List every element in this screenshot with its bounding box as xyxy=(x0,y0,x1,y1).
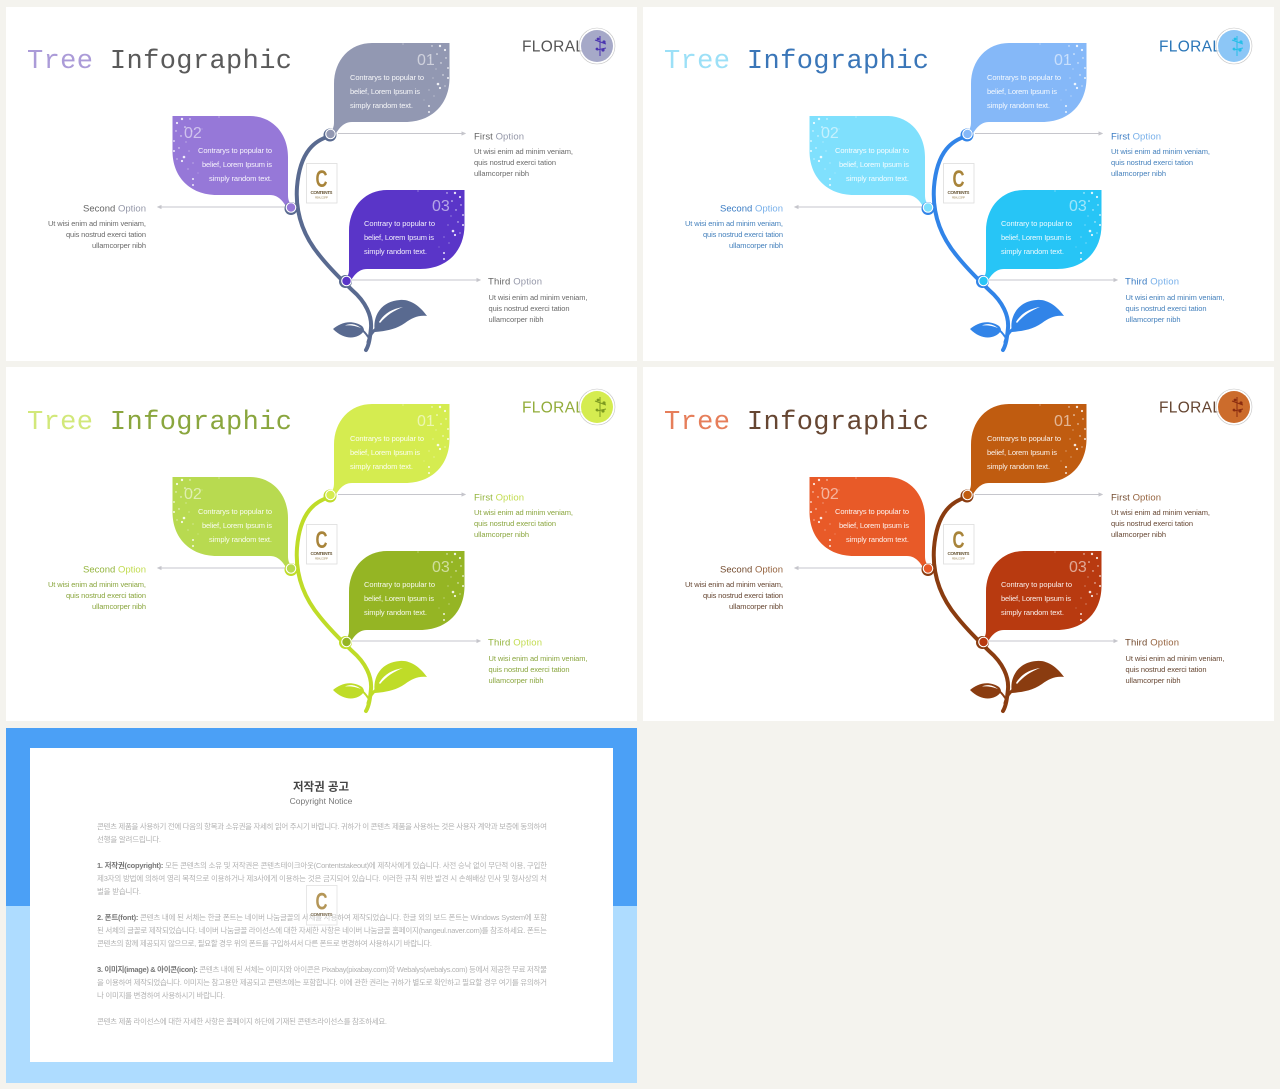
section 2: font: 2. 폰트(font): 콘텐츠 내에 된 서체는 한글 폰트는 네이버 나눔글꼴의 서체를 사용하여 제작되었습니다. 한글 외의 보드 폰트는 Windows System에 포함 xyxy=(97,912,547,922)
leaf 03: Contrary to popular to xyxy=(364,580,435,589)
leaf 01: Contrarys to popular to xyxy=(987,434,1061,443)
node 02 xyxy=(284,563,298,576)
section 1: copyright: 벌을 받습니다. xyxy=(97,886,141,896)
light blue background bottom xyxy=(6,906,637,1083)
section 3: image and icon: 3. 이미지(image) & 아이콘(icon): 콘텐츠 내에 된 서체는 이미지와 아이콘은 Pixabay(pixabay.com)와 Webalys(webalys.com) 등에서 제공한 무료 저작물 xyxy=(97,964,547,974)
leaf 01: 01 xyxy=(417,52,435,69)
leaf 01: belief, Lorem Ipsum is xyxy=(350,448,420,457)
node 01 xyxy=(324,128,336,142)
leaf 02: Contrarys to popular to xyxy=(835,507,909,516)
text: first option: First Option xyxy=(1111,492,1161,504)
text: first option: ullamcorper nibh xyxy=(1111,530,1166,539)
connector line: first option xyxy=(338,493,465,496)
logo: Contents stamp: REAL CORP xyxy=(952,196,965,200)
text: third option: ullamcorper nibh xyxy=(488,315,544,324)
leaf 03 xyxy=(343,190,464,286)
logo: Floral xyxy=(1159,389,1252,425)
text: first option: First Option xyxy=(474,132,524,142)
leaf 03: Contrary to popular to xyxy=(1001,219,1072,228)
leaf 02: Contrarys to popular to xyxy=(198,146,272,155)
tree stem xyxy=(934,136,1008,350)
text: first option: quis nostrud exerci tation xyxy=(1111,519,1193,528)
connector line: second option xyxy=(158,567,285,569)
node 01 xyxy=(960,490,974,502)
leaf 03: simply random text. xyxy=(1001,608,1064,617)
logo: Contents stamp: CONTENTS xyxy=(948,551,970,556)
watermark: Contents stamp xyxy=(306,886,337,925)
text: third option: quis nostrud exerci tation xyxy=(1126,304,1206,313)
tree stem xyxy=(297,136,371,350)
text: third option: Third Option xyxy=(1125,638,1179,648)
logo: Contents stamp xyxy=(306,164,337,203)
text: second option: Ut wisi enim ad minim veniam, xyxy=(685,580,783,589)
logo: Contents stamp: CONTENTS xyxy=(310,190,332,195)
leaf 03 xyxy=(980,551,1102,647)
intro paragraph: 콘텐츠 제품을 사용하기 전에 다음의 항목과 소유권을 자세히 읽어 주시기 바랍니다. 귀하가 이 콘텐츠 제품을 사용하는 것은 사용자 계약과 보증에 동의하여 xyxy=(97,821,547,831)
text: second option xyxy=(685,564,783,611)
leaf 03: 03 xyxy=(1069,559,1087,576)
logo: Contents stamp: REAL CORP xyxy=(315,196,328,200)
logo: Floral: FLORAL xyxy=(522,400,584,416)
text: second option xyxy=(685,204,783,250)
text: first option: Ut wisi enim ad minim veniam, xyxy=(1111,147,1210,156)
logo: Contents stamp xyxy=(944,524,974,564)
white notice card xyxy=(30,748,613,1062)
node 01 xyxy=(960,128,974,142)
title: Tree Infographic xyxy=(27,408,292,438)
leaf 01: simply random text. xyxy=(350,462,413,471)
section 3: image and icon: 나 이미지를 변경하여 사용하시기 바랍니다. xyxy=(97,990,225,1000)
heading: copyright notice Korean: 저작권 공고 xyxy=(293,780,349,794)
logo: Floral xyxy=(1159,28,1252,64)
connector line: third option xyxy=(352,279,480,281)
text: second option: Second Option xyxy=(83,204,146,214)
section 1: copyright: 1. 저작권(copyright): 모든 콘텐츠의 소유 및 저작권은 콘텐츠테이크아웃(Contentstakeout)에 제작사에게 있습니다. 사전 승낙 없이 무단적 이용, 구입한 xyxy=(97,860,547,870)
text: second option xyxy=(48,564,146,611)
section 3: image and icon xyxy=(97,964,547,1000)
text: first option: ullamcorper nibh xyxy=(474,169,529,178)
section 1: copyright: 제3자의 방법에 의하여 영리 목적으로 이용하거나 제3사에게 이용하는 것은 금지되어 있습니다. 이러한 규칙 위반 발견 시 손해배상 민사 및 형사상의 처 xyxy=(97,873,547,883)
text: first option: Ut wisi enim ad minim veniam, xyxy=(474,147,573,156)
text: third option: quis nostrud exerci tation xyxy=(488,665,570,674)
connector line: first option xyxy=(975,132,1102,135)
text: first option: Ut wisi enim ad minim veniam, xyxy=(474,508,573,517)
panel background xyxy=(643,7,1274,361)
logo: Contents stamp: REAL CORP xyxy=(315,556,328,560)
text: third option: ullamcorper nibh xyxy=(1126,315,1180,324)
leaf 03: Contrary to popular to xyxy=(364,219,435,228)
tree stem xyxy=(934,497,1008,711)
blue background top xyxy=(6,728,637,906)
node 02 xyxy=(284,202,298,215)
leaf 01: simply random text. xyxy=(350,101,413,110)
text: second option: quis nostrud exerci tation xyxy=(703,230,783,239)
intro paragraph xyxy=(97,821,547,844)
text: second option: Second Option xyxy=(720,564,783,576)
tree base leaves xyxy=(970,661,1064,703)
leaf 01 xyxy=(328,404,450,500)
leaf 03: simply random text. xyxy=(364,247,427,256)
watermark: Contents stamp: CONTENTS xyxy=(310,912,332,917)
text: third option: quis nostrud exerci tation xyxy=(1126,665,1206,674)
leaf 02 xyxy=(810,116,931,212)
logo: Floral xyxy=(522,389,615,425)
leaf 02: 02 xyxy=(184,125,202,142)
leaf 02: simply random text. xyxy=(846,535,909,544)
leaf 01: Contrarys to popular to xyxy=(350,434,424,443)
panel: orange tree infographic xyxy=(643,367,1274,721)
text: second option: Ut wisi enim ad minim veniam, xyxy=(685,219,783,228)
tree base leaves xyxy=(970,300,1064,342)
closing line: 콘텐츠 제품 라이선스에 대한 자세한 사항은 홈페이지 하단에 기재된 콘텐츠라이선스를 참조하세요. xyxy=(97,1016,387,1026)
panel background xyxy=(643,367,1274,721)
panel: purple tree infographic xyxy=(6,7,637,361)
text: third option: Third Option xyxy=(488,638,542,648)
leaf 01: 01 xyxy=(417,413,435,430)
panel: green tree infographic xyxy=(6,367,637,721)
node 03 xyxy=(339,275,352,288)
text: third option: Ut wisi enim ad minim veniam, xyxy=(488,654,588,663)
text: second option: Second Option xyxy=(83,564,146,576)
leaf 02: simply random text. xyxy=(209,535,272,544)
text: first option: First Option xyxy=(1111,132,1161,142)
text: first option: quis nostrud exerci tation xyxy=(474,158,556,167)
logo: Contents stamp: CONTENTS xyxy=(310,551,332,556)
node 01 xyxy=(324,490,336,502)
leaf 01: belief, Lorem Ipsum is xyxy=(987,87,1057,96)
leaf 02: belief, Lorem Ipsum is xyxy=(202,521,272,530)
leaf 01: 01 xyxy=(1054,413,1072,430)
logo: Floral xyxy=(522,28,615,64)
text: third option: Ut wisi enim ad minim veniam, xyxy=(1126,293,1224,302)
text: first option: ullamcorper nibh xyxy=(1111,169,1166,178)
leaf 02 xyxy=(172,477,294,573)
connector line: third option xyxy=(989,640,1117,642)
logo: Floral: FLORAL xyxy=(522,38,584,56)
text: third option: ullamcorper nibh xyxy=(488,676,544,685)
text: second option: Ut wisi enim ad minim veniam, xyxy=(48,219,146,228)
text: second option: Second Option xyxy=(720,204,783,214)
text: first option xyxy=(1111,492,1210,539)
leaf 02: simply random text. xyxy=(209,174,272,183)
text: third option: Ut wisi enim ad minim veniam, xyxy=(488,293,588,302)
leaf 03: 03 xyxy=(1069,198,1087,215)
logo: Contents stamp: C xyxy=(316,166,328,193)
text: first option xyxy=(1111,132,1210,178)
text: third option: quis nostrud exerci tation xyxy=(488,304,570,313)
leaf 01 xyxy=(328,43,450,139)
panel background xyxy=(6,7,637,361)
leaf 03: simply random text. xyxy=(364,608,427,617)
section 2: font xyxy=(97,912,547,948)
section 1: copyright xyxy=(97,860,547,896)
leaf 01 xyxy=(965,404,1086,500)
text: second option: ullamcorper nibh xyxy=(92,602,146,611)
leaf 02: 02 xyxy=(821,486,839,503)
panel: copyright notice xyxy=(6,728,637,1083)
leaf 01: Contrarys to popular to xyxy=(350,73,424,82)
intro paragraph: 선행을 알려드립니다. xyxy=(97,834,161,844)
leaf 02 xyxy=(172,116,294,212)
text: second option xyxy=(48,204,146,250)
text: second option: ullamcorper nibh xyxy=(729,602,783,611)
leaf 03: Contrary to popular to xyxy=(1001,580,1072,589)
title: Tree Infographic xyxy=(27,47,292,77)
leaf 02: belief, Lorem Ipsum is xyxy=(839,160,909,169)
node 03 xyxy=(976,275,989,288)
leaf 01: belief, Lorem Ipsum is xyxy=(350,87,420,96)
leaf 03: belief, Lorem Ipsum is xyxy=(364,233,434,242)
leaf 03 xyxy=(343,551,464,647)
text: third option: ullamcorper nibh xyxy=(1126,676,1180,685)
leaf 03: belief, Lorem Ipsum is xyxy=(364,594,434,603)
watermark: Contents stamp: C xyxy=(316,888,328,916)
leaf 03: belief, Lorem Ipsum is xyxy=(1001,594,1071,603)
logo: Floral: FLORAL xyxy=(1159,400,1221,416)
leaf 02: belief, Lorem Ipsum is xyxy=(839,521,909,530)
section 2: font: 콘텐츠의 함께 제공되지 않으므로, 필요할 경우 위의 폰트를 구입하셔서 다른 폰트로 변경하여 사용하시기 바랍니다. xyxy=(97,938,432,948)
text: second option: Ut wisi enim ad minim veniam, xyxy=(48,580,146,589)
leaf 02: Contrarys to popular to xyxy=(835,146,909,155)
leaf 02 xyxy=(810,477,931,573)
logo: Contents stamp: C xyxy=(952,527,964,554)
leaf 01 xyxy=(965,43,1086,139)
node 02 xyxy=(922,563,934,576)
text: third option: Ut wisi enim ad minim veniam, xyxy=(1126,654,1224,663)
text: first option xyxy=(474,492,573,539)
leaf 01: belief, Lorem Ipsum is xyxy=(987,448,1057,457)
subheading: copyright notice: Copyright Notice xyxy=(290,796,353,806)
logo: Contents stamp xyxy=(944,164,974,203)
connector line: third option xyxy=(989,279,1117,281)
logo: Contents stamp: C xyxy=(316,527,328,554)
connector line: second option xyxy=(795,206,922,208)
node 03 xyxy=(339,636,352,649)
tree base leaves xyxy=(333,300,427,342)
leaf 03: simply random text. xyxy=(1001,247,1064,256)
text: third option xyxy=(1125,638,1224,685)
leaf 01: simply random text. xyxy=(987,101,1050,110)
section 2: font: 된 서체의 글꼴로 제작되었습니다. 네이버 나눔글꼴 라이선스에 대한 자세한 사항은 네이버 나눔글꼴 홈페이지(hangeul.naver.com)를 참조하세요. 폰트는 xyxy=(97,925,547,935)
text: first option: quis nostrud exerci tation xyxy=(1111,158,1193,167)
text: second option: quis nostrud exerci tation xyxy=(66,591,146,600)
logo: Contents stamp: CONTENTS xyxy=(948,190,970,195)
section 3: image and icon: 을 이용하여 제작되었습니다. 이미지는 참고용만 제공되고 콘텐츠에는 포함합니다. 이에 관한 권리는 귀하가 별도로 확인하고 필요할 경우 여기를 유의하거 xyxy=(97,977,547,987)
panel: blue tree infographic xyxy=(643,7,1274,361)
text: second option: ullamcorper nibh xyxy=(729,241,783,250)
node 02 xyxy=(922,202,934,215)
leaf 03: belief, Lorem Ipsum is xyxy=(1001,233,1071,242)
title: Tree Infographic xyxy=(664,47,929,77)
text: first option: ullamcorper nibh xyxy=(474,530,529,539)
text: first option: quis nostrud exerci tation xyxy=(474,519,556,528)
text: first option xyxy=(474,132,573,178)
leaf 03: 03 xyxy=(432,198,450,215)
text: second option: quis nostrud exerci tation xyxy=(703,591,783,600)
leaf 01: simply random text. xyxy=(987,462,1050,471)
text: third option xyxy=(488,276,588,324)
leaf 02: 02 xyxy=(184,486,202,503)
leaf 02: belief, Lorem Ipsum is xyxy=(202,160,272,169)
text: first option: Ut wisi enim ad minim veniam, xyxy=(1111,508,1210,517)
tree base leaves xyxy=(333,661,427,703)
text: first option: First Option xyxy=(474,492,524,504)
connector line: first option xyxy=(338,132,465,135)
text: third option xyxy=(488,638,588,685)
logo: Floral: FLORAL xyxy=(1159,38,1221,56)
leaf 01: 01 xyxy=(1054,52,1072,69)
tree stem xyxy=(297,497,371,711)
leaf 01: Contrarys to popular to xyxy=(987,73,1061,82)
connector line: second option xyxy=(158,206,285,208)
leaf 02: 02 xyxy=(821,125,839,142)
connector line: second option xyxy=(795,567,922,569)
text: second option: quis nostrud exerci tation xyxy=(66,230,146,239)
text: third option xyxy=(1125,276,1224,324)
leaf 03 xyxy=(980,190,1102,286)
node 03 xyxy=(976,636,989,649)
text: third option: Third Option xyxy=(1125,276,1179,288)
text: third option: Third Option xyxy=(488,276,542,288)
logo: Contents stamp xyxy=(306,524,337,564)
logo: Contents stamp: C xyxy=(952,166,964,193)
logo: Contents stamp: REAL CORP xyxy=(952,556,965,560)
panel background xyxy=(6,367,637,721)
connector line: first option xyxy=(975,493,1102,496)
leaf 02: simply random text. xyxy=(846,174,909,183)
connector line: third option xyxy=(352,640,480,642)
leaf 02: Contrarys to popular to xyxy=(198,507,272,516)
leaf 03: 03 xyxy=(432,559,450,576)
title: Tree Infographic xyxy=(664,408,929,438)
text: second option: ullamcorper nibh xyxy=(92,241,146,250)
